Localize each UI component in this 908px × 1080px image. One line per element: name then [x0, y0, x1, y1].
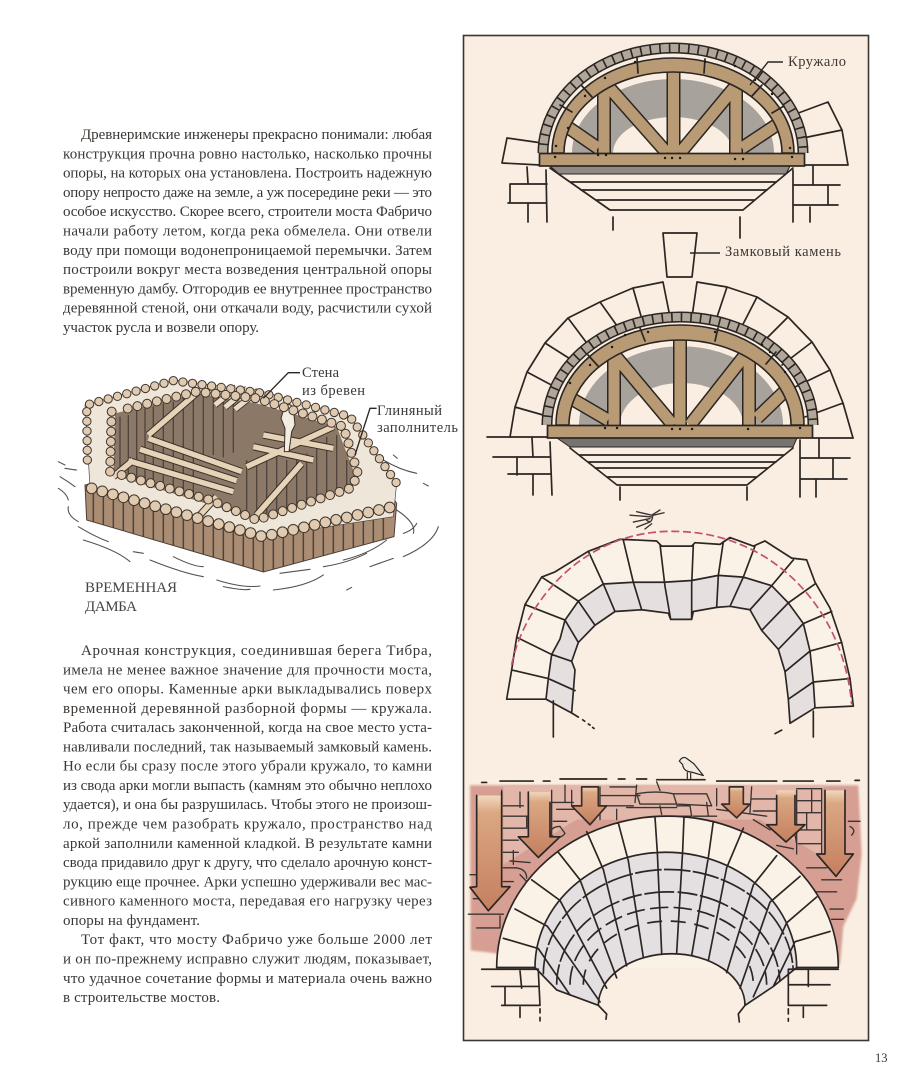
- side masonry: [487, 437, 853, 497]
- abutment masonry: [482, 969, 838, 1022]
- lagging stack: [550, 166, 790, 174]
- text block: arch paragraph: рукцию еще прочнее. Арки успешно удерживали вес мас-: [63, 874, 432, 890]
- text block: arch paragraph: что удачное сочетание формы и материала очень важно: [63, 971, 432, 987]
- text block: arch paragraph: имела не менее важное значение для прочности моста,: [63, 662, 432, 678]
- bird perched: [679, 757, 703, 779]
- diagram 1: centering: [502, 48, 848, 238]
- outer front wall: [85, 483, 397, 572]
- masonry joints: [468, 782, 860, 928]
- text block: dam paragraph: конструкция прочна ровно настолько, насколько прочны: [63, 146, 432, 162]
- text block: dam paragraph: деревянной стеной, они откачали воду, расчистили сухой: [63, 301, 432, 317]
- diagram 4: finished arch with masonry and load arrows: [468, 757, 862, 1022]
- diagram 3: arch with red line of deformation: [507, 510, 853, 737]
- clay fill band: [85, 380, 397, 537]
- text block: dam paragraph: воду при помощи водонепроницаемой перемычки. Затем: [63, 243, 432, 259]
- text block: arch paragraph: Тот факт, что мосту Фабричо уже больше 2000 лет: [81, 932, 432, 948]
- voussoirs: [510, 282, 853, 438]
- text block: arch paragraph: чем его опоры. Каменные арки выкладывались поверх: [63, 682, 432, 698]
- ring joints: [560, 58, 784, 113]
- panel: arch construction stages: [464, 36, 868, 1040]
- label: keystone: Замковый камень: [725, 244, 841, 260]
- abutment stones: [502, 102, 848, 222]
- back log ring: [87, 381, 397, 483]
- text block: arch paragraph: навливали последний, так называемый замковый камень.: [63, 739, 432, 755]
- beam: [540, 154, 804, 166]
- icon: keystone: [663, 233, 697, 277]
- nails: [555, 62, 792, 159]
- masonry background: [470, 785, 862, 964]
- label: centering: Кружало: [788, 54, 846, 70]
- label: log wall: из бревен: [302, 383, 365, 399]
- stone outlines: [507, 538, 853, 723]
- white outer voussoirs: [507, 538, 853, 708]
- front log ring: [92, 488, 393, 537]
- struts: [566, 62, 778, 153]
- label: log wall: Стена: [302, 365, 340, 381]
- arch outlines and joints: [497, 816, 838, 1005]
- text block: arch paragraph: и он по-прежнему исправно служит людям, показывает,: [63, 952, 432, 968]
- props: [553, 701, 813, 737]
- diagram 2: arch stones on centering: [487, 282, 853, 500]
- label: log wall: [302, 365, 365, 399]
- text block: dam paragraph: участок русла и возвели опору.: [63, 320, 259, 336]
- page number: 13: [875, 1051, 888, 1065]
- leader lines: [263, 373, 377, 455]
- top planks: [215, 387, 258, 409]
- text block: arch paragraph: опоры на фундамент.: [63, 913, 200, 929]
- ring joints: [588, 328, 776, 366]
- label: clay fill: заполнитель: [377, 420, 458, 436]
- arrow outlines: [470, 790, 853, 911]
- text block: dam paragraph: построили вокруг места возведения центральной опоры: [63, 262, 432, 278]
- text block: arch paragraph: в строительстве мостов.: [63, 990, 220, 1006]
- text block: arch paragraph: сивного каменного моста, передавая его нагрузку через: [63, 894, 432, 910]
- text block: dam paragraph: опору непросто даже на земле, а уж посередине реки — это: [63, 185, 432, 201]
- load arrows: [470, 787, 853, 911]
- water ripples: [58, 455, 438, 590]
- caption: temporary dam: ВРЕМЕННАЯ: [85, 580, 177, 596]
- text block: dam paragraph: начали работу летом, когда река обмелела. Они отвели: [63, 224, 432, 240]
- red dashed curve: [512, 531, 852, 704]
- beam: [548, 426, 812, 438]
- nails: [570, 332, 800, 429]
- parapet dashed line: [482, 779, 859, 782]
- light masonry: [503, 785, 823, 864]
- label: clay fill: Глиняный: [377, 403, 442, 419]
- grey stone background: [579, 346, 783, 425]
- caption: temporary dam: [85, 580, 177, 615]
- text block: arch paragraph: ло, прежде чем разобрать кружало, пространство над: [63, 816, 432, 832]
- text block: arch paragraph: Арочная конструкция, соединившая берега Тибра,: [81, 643, 432, 659]
- course lines: [543, 869, 793, 985]
- text block: dam paragraph: [63, 127, 432, 336]
- text block: dam paragraph: опоры, на которых она установлена. Построить надежную: [63, 166, 432, 182]
- inner log ring: [110, 392, 358, 520]
- brick band: [543, 48, 803, 153]
- caption: temporary dam: ДАМБА: [85, 599, 137, 615]
- wall logs: [93, 490, 383, 572]
- text block: dam paragraph: Древнеримские инженеры прекрасно понимали: любая: [81, 127, 432, 143]
- text block: dam paragraph: особое искусство. Скорее всего, строители моста Фабричо: [63, 204, 432, 220]
- grey stone background: [572, 79, 774, 153]
- text block: arch paragraph: свода придавило друг к другу, что сделало арочную конст-: [63, 855, 432, 871]
- text block: arch paragraph: временной деревянной разборной формы — кружала.: [63, 701, 432, 717]
- grey inner courses: [535, 852, 797, 1005]
- bird in flight: [630, 510, 664, 529]
- grey inner voussoirs: [546, 575, 815, 723]
- arch ring base: [497, 816, 838, 968]
- label: clay fill: [377, 403, 458, 436]
- bracing planks: [113, 392, 333, 515]
- inner pit walls: [113, 393, 358, 520]
- lagging stack: [557, 438, 797, 447]
- text block: dam paragraph: временную дамбу. Отгородив ее внутреннее пространство: [63, 281, 432, 297]
- text block: arch paragraph: из свода арки могли выпасть (камням это обычно неплохо: [63, 778, 432, 794]
- brick band: [547, 317, 813, 425]
- leader: centering: [750, 62, 783, 85]
- text block: arch paragraph: удается), и она бы разрушилась. Чтобы этого не произош-: [63, 797, 432, 813]
- worker figure: [281, 404, 295, 452]
- struts: [572, 335, 784, 425]
- text block: arch paragraph: Работа считалась законченной, когда на свое место уста-: [63, 720, 432, 736]
- text block: arch paragraph: [63, 643, 432, 1006]
- text block: arch paragraph: Но если бы сразу после этого убрали кружало, то камни: [63, 759, 432, 775]
- leader: keystone: [690, 252, 720, 254]
- wood ring: [556, 325, 804, 425]
- illustration: temporary dam: [58, 373, 438, 590]
- text block: arch paragraph: аркой заполнили каменной кладкой. В результате камни: [63, 836, 432, 852]
- wood ring: [552, 58, 794, 153]
